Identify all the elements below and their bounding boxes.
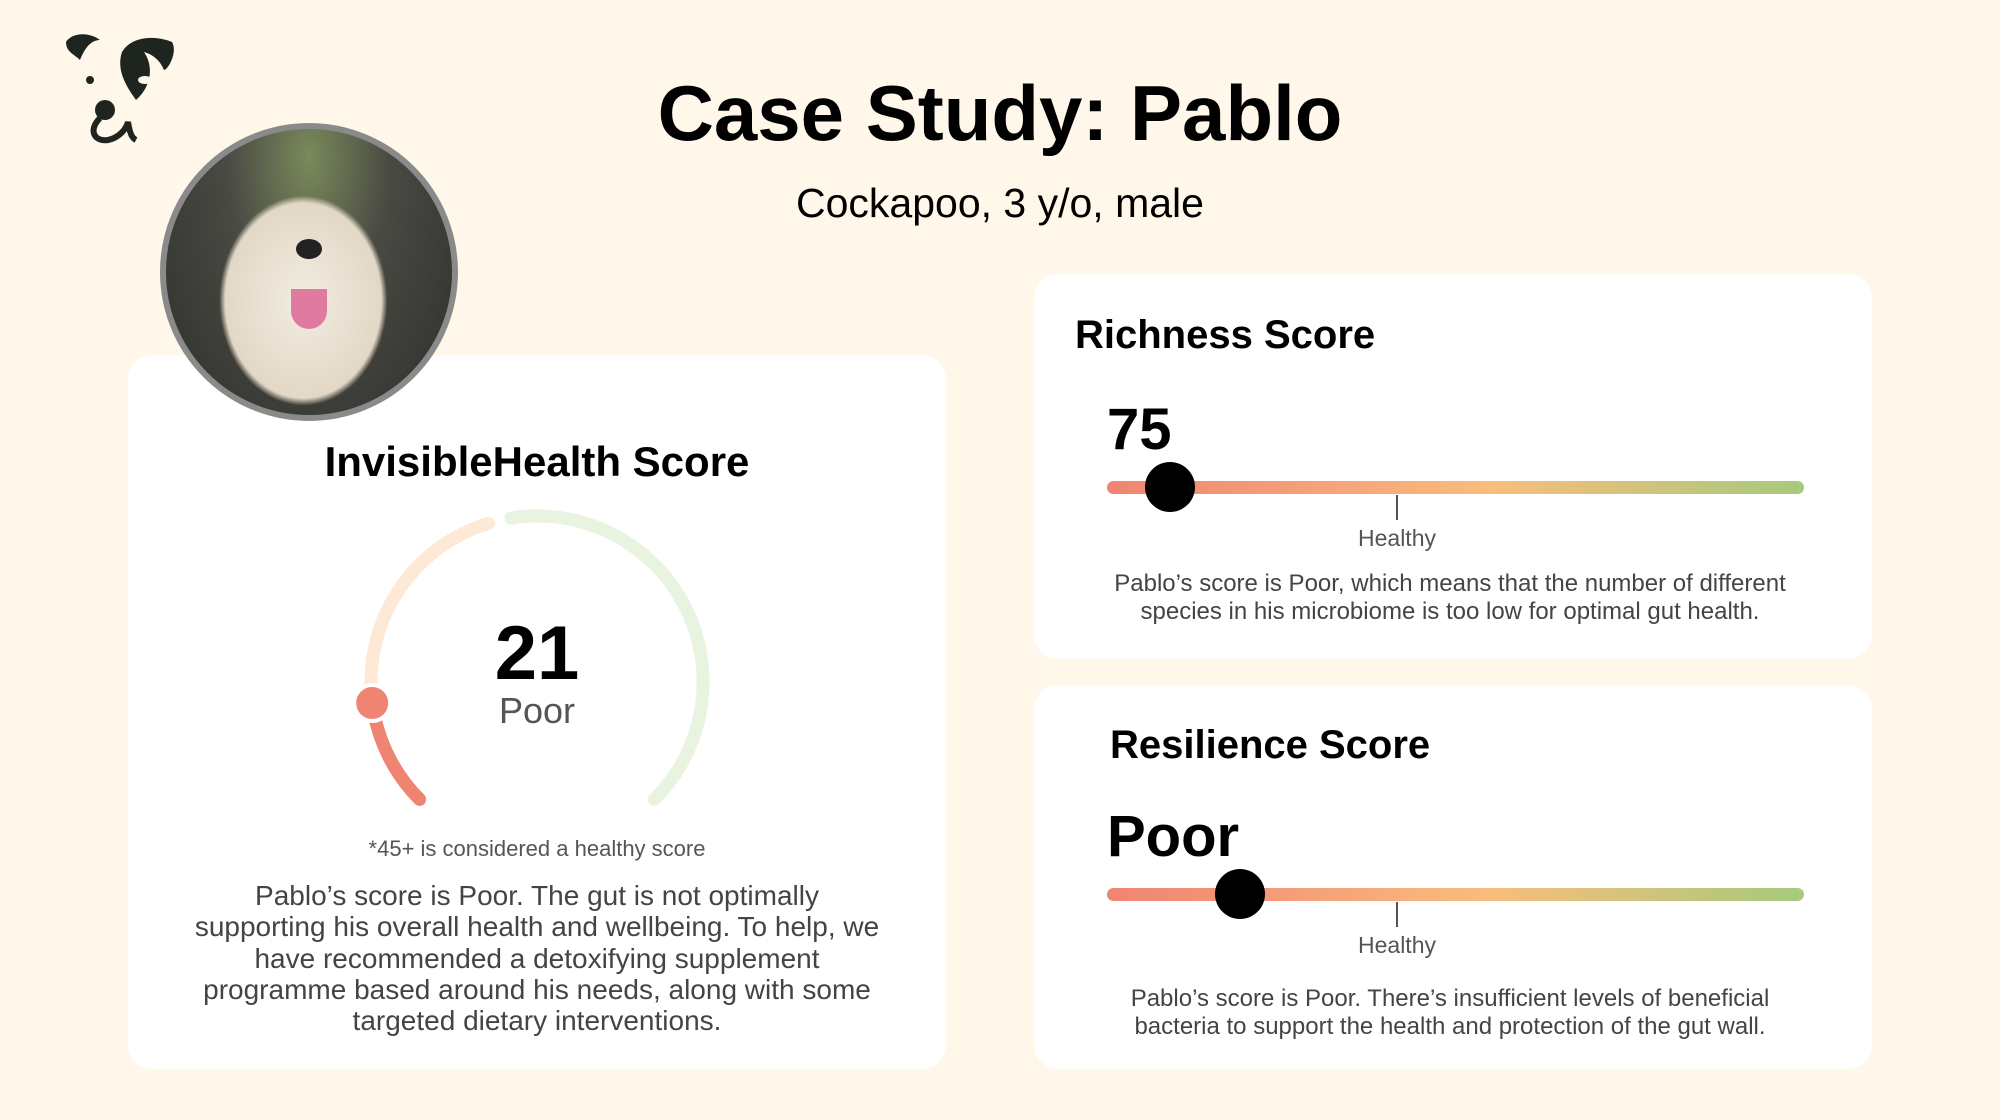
panel: Richness score bbox=[1034, 274, 1872, 659]
gauge label: Poor bbox=[499, 690, 575, 731]
text: resilience description: Pablo’s score is Poor. There’s insufficient levels of beneficial bbox=[1131, 985, 1769, 1012]
text: InvisibleHealth description: Pablo’s score is Poor. The gut is not optimally bbox=[255, 880, 819, 911]
text: InvisibleHealth description: supporting his overall health and wellbeing. To help, we bbox=[195, 911, 879, 942]
text: InvisibleHealth description: targeted dietary interventions. bbox=[353, 1005, 721, 1036]
resilience healthy label: Healthy bbox=[1358, 932, 1436, 958]
heading: Resilience Score: Resilience Score bbox=[1110, 723, 1430, 767]
text: InvisibleHealth description: have recommended a detoxifying supplement bbox=[254, 943, 820, 974]
text: resilience description: bacteria to support the health and protection of the gut wall. bbox=[1134, 1013, 1766, 1040]
footnote: *45+ is considered a healthy score bbox=[369, 836, 705, 861]
resilience knob bbox=[1215, 869, 1265, 919]
gauge chart bbox=[356, 510, 710, 806]
panel: Resilience score bbox=[1034, 685, 1872, 1069]
richness value: 75 bbox=[1107, 397, 1172, 462]
richness slider bbox=[1107, 481, 1804, 494]
title: Case Study: Pablo bbox=[658, 69, 1342, 157]
text: InvisibleHealth description: programme based around his needs, along with some bbox=[203, 974, 871, 1005]
text: richness description bbox=[1114, 570, 1786, 625]
logo bbox=[66, 34, 174, 144]
text: InvisibleHealth description bbox=[195, 880, 879, 1036]
text: resilience description bbox=[1131, 985, 1769, 1040]
gauge value: 21 bbox=[495, 611, 579, 696]
richness healthy label: Healthy bbox=[1358, 525, 1436, 551]
richness healthy marker bbox=[1396, 495, 1398, 520]
resilience healthy marker bbox=[1396, 902, 1398, 927]
heading: Richness Score: Richness Score bbox=[1075, 313, 1375, 357]
richness knob bbox=[1145, 462, 1195, 512]
resilience slider bbox=[1107, 888, 1804, 901]
resilience value: Poor bbox=[1107, 804, 1239, 869]
heading: InvisibleHealth Score: InvisibleHealth Score bbox=[325, 438, 749, 485]
subtitle: Cockapoo, 3 y/o, male bbox=[796, 180, 1204, 226]
photo: dog bbox=[160, 123, 458, 421]
panel: InvisibleHealth score bbox=[128, 355, 946, 1069]
text: richness description: species in his microbiome is too low for optimal gut health. bbox=[1141, 598, 1759, 625]
text: richness description: Pablo’s score is Poor, which means that the number of different bbox=[1114, 570, 1786, 597]
